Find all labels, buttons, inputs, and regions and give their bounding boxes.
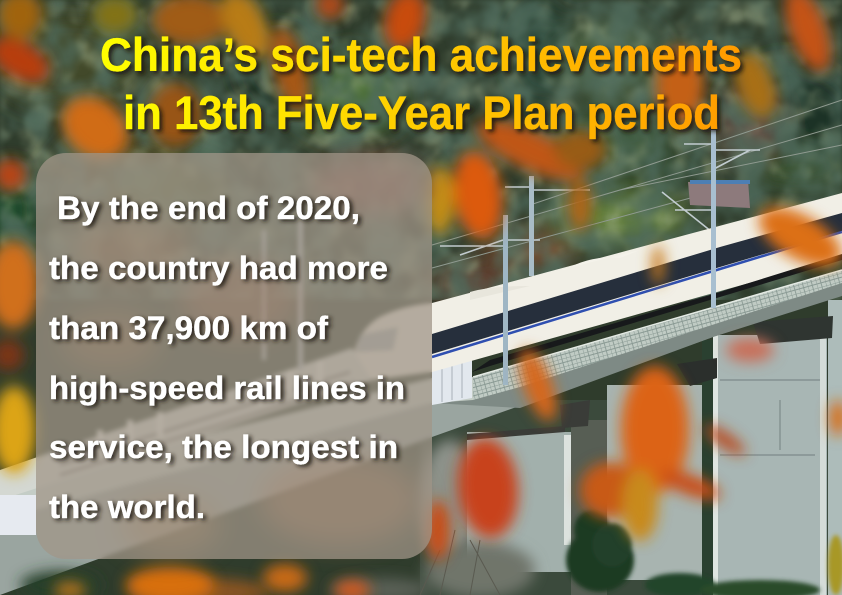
bridge deck <box>0 270 842 595</box>
body text: high-speed rail lines in <box>49 370 405 406</box>
body text: than 37,900 km of <box>49 310 328 346</box>
catenary poles in front of train <box>503 130 716 385</box>
dark gaps between piers <box>420 340 842 595</box>
piers <box>467 300 842 595</box>
body text: By the end of 2020, <box>57 190 360 226</box>
title <box>100 28 742 139</box>
title: China’s sci-tech achievements <box>100 28 742 81</box>
far track behind panel <box>0 220 372 535</box>
muted shapes beneath the panel <box>60 155 430 555</box>
lower vegetation <box>20 510 842 595</box>
overhead wires <box>432 100 842 276</box>
high-speed train <box>352 193 842 380</box>
foliage texture <box>0 0 842 300</box>
body text: the country had more <box>49 250 388 286</box>
panel: translucent text card <box>36 153 432 559</box>
body text: the world. <box>49 489 205 525</box>
body text <box>49 190 405 525</box>
title: in 13th Five-Year Plan period <box>123 86 720 139</box>
body text: service, the longest in <box>49 429 398 465</box>
